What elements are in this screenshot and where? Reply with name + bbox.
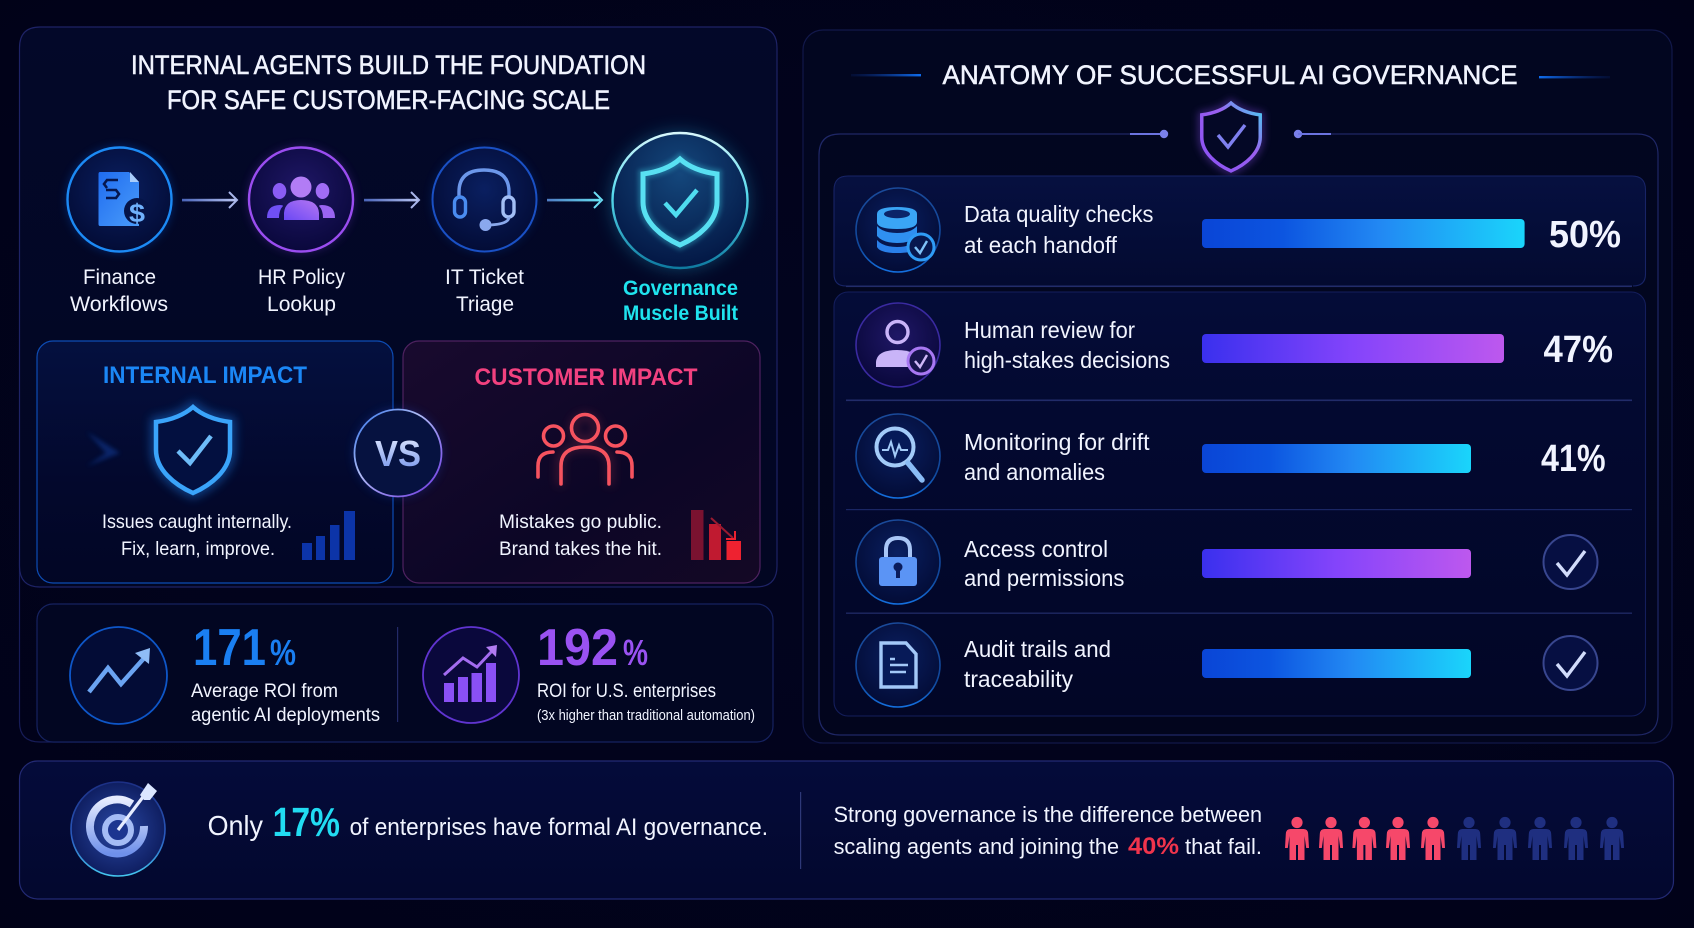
row: access control	[856, 520, 1598, 604]
icon: padlock	[856, 520, 940, 604]
title	[131, 50, 646, 115]
icon: pictogram of ten people	[1285, 817, 1624, 860]
step: governance muscle built	[612, 132, 748, 325]
value: %	[623, 632, 648, 673]
label: Lookup	[267, 293, 336, 316]
icon: document	[856, 623, 940, 707]
icon: database check	[856, 188, 940, 272]
label: Audit trails and	[964, 636, 1111, 662]
icon: shield	[156, 407, 230, 493]
label: HR Policy	[258, 266, 345, 289]
icon: trend arrow	[70, 627, 167, 724]
label: Triage	[456, 293, 514, 316]
label	[964, 536, 1124, 591]
title: INTERNAL AGENTS BUILD THE FOUNDATION	[131, 50, 646, 80]
value: 171	[193, 619, 266, 677]
icon: rising bars	[302, 511, 355, 560]
bar	[1202, 649, 1471, 678]
arrow	[182, 192, 237, 208]
icon: target	[71, 782, 165, 876]
title: FOR SAFE CUSTOMER-FACING SCALE	[167, 85, 610, 115]
label: and permissions	[964, 565, 1124, 591]
heading: INTERNAL IMPACT	[103, 362, 307, 389]
label	[623, 276, 738, 325]
step: hr policy lookup	[249, 148, 353, 316]
icon: glowing shield	[612, 132, 748, 268]
vs badge: VS	[375, 433, 421, 474]
row container	[834, 176, 1646, 716]
label	[258, 266, 345, 316]
label: Data quality checks	[964, 201, 1154, 227]
check badge	[1544, 636, 1598, 690]
caption: (3x higher than traditional automation)	[537, 708, 755, 724]
panel: customer impact	[403, 341, 760, 583]
label: Workflows	[70, 293, 168, 316]
icon: growth chart	[423, 627, 519, 723]
text	[499, 511, 662, 560]
callout: forty percent: Strong governance is the difference between	[834, 802, 1262, 827]
icon: magnifier	[856, 414, 940, 498]
panel: internal impact	[37, 341, 393, 583]
icon: finance document: $	[129, 198, 146, 228]
label	[964, 317, 1170, 373]
label	[445, 266, 524, 316]
row: data quality	[856, 188, 1621, 272]
label: Monitoring for drift	[964, 429, 1150, 455]
callout: forty percent: scaling agents and joining the	[834, 834, 1119, 859]
row: audit trails	[856, 623, 1598, 707]
label: Governance	[623, 276, 738, 300]
icon: gradient shield	[1202, 103, 1260, 171]
icon: finance document	[68, 148, 172, 252]
text: Fix, learn, improve.	[121, 538, 275, 560]
text: Brand takes the hit.	[499, 538, 662, 560]
label	[964, 429, 1150, 485]
text: Mistakes go public.	[499, 511, 662, 533]
label: Finance	[83, 266, 156, 289]
heading: CUSTOMER IMPACT	[474, 364, 698, 391]
banner	[20, 761, 1674, 899]
value: 192	[537, 619, 618, 677]
panel: roi stats	[37, 604, 773, 742]
label: at each handoff	[964, 232, 1117, 258]
label: Muscle Built	[623, 301, 738, 325]
callout: seventeen percent: of enterprises have formal AI governance.	[350, 814, 768, 841]
callout: seventeen percent: 17%	[273, 799, 340, 845]
vs badge	[354, 409, 442, 497]
stat: 171 percent	[70, 619, 380, 726]
stat: 192 percent	[423, 619, 755, 724]
label	[964, 201, 1154, 258]
row: human review	[856, 303, 1613, 387]
caption: Average ROI from	[191, 681, 338, 702]
bar	[1202, 334, 1504, 363]
value: 50%	[1549, 214, 1621, 256]
panel: internal agents foundation	[20, 27, 777, 742]
caption	[191, 681, 380, 726]
callout: forty percent: 40%	[1128, 833, 1179, 860]
icon: person check	[856, 303, 940, 387]
panel: anatomy of successful ai governance	[803, 30, 1672, 743]
label	[70, 266, 168, 316]
value: 47%	[1544, 329, 1613, 371]
label	[964, 636, 1111, 692]
caption	[537, 681, 755, 724]
icon: outlined people	[538, 414, 632, 484]
text: Issues caught internally.	[102, 511, 292, 533]
caption: ROI for U.S. enterprises	[537, 681, 716, 702]
step: finance workflows	[68, 148, 172, 316]
arrow	[547, 192, 602, 208]
label: Human review for	[964, 317, 1135, 343]
check badge	[1544, 535, 1598, 589]
icon: headset	[432, 148, 536, 252]
step: it ticket triage	[432, 148, 536, 316]
caption: agentic AI deployments	[191, 705, 380, 726]
label: IT Ticket	[445, 266, 524, 289]
callout: seventeen percent	[208, 799, 768, 845]
bar	[1202, 549, 1471, 578]
icon: people	[249, 148, 353, 252]
bar	[1202, 444, 1471, 473]
callout: forty percent	[834, 802, 1262, 860]
bar	[1202, 219, 1525, 248]
value: %	[270, 632, 296, 673]
label: high-stakes decisions	[964, 347, 1170, 373]
icon: falling bars	[691, 510, 741, 560]
row: monitoring	[856, 414, 1606, 498]
label: traceability	[964, 666, 1073, 692]
label: and anomalies	[964, 459, 1105, 485]
value: 41%	[1541, 438, 1606, 480]
callout: forty percent: that fail.	[1185, 834, 1262, 859]
arrow	[364, 192, 419, 208]
text	[102, 511, 292, 560]
inner frame	[819, 130, 1658, 735]
label: Access control	[964, 536, 1108, 562]
heading: ANATOMY OF SUCCESSFUL AI GOVERNANCE	[942, 60, 1518, 90]
callout: seventeen percent: Only	[208, 810, 263, 841]
